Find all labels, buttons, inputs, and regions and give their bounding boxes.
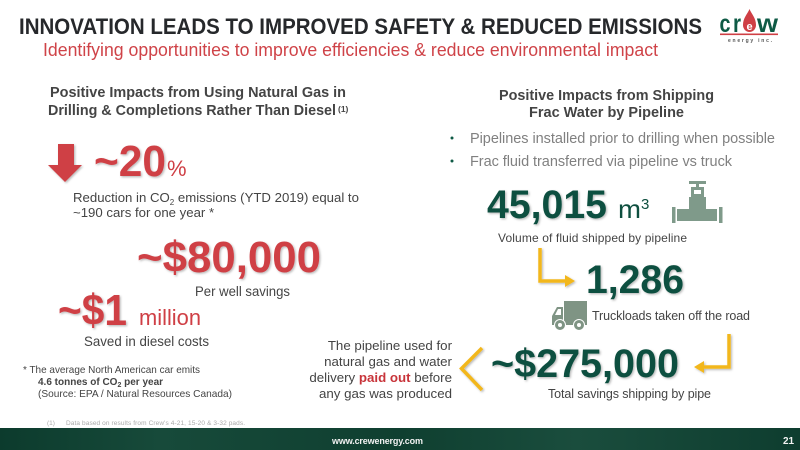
callout: pipeline paid out: delivery paid out before xyxy=(309,370,452,385)
stat: 20 percent: % xyxy=(167,156,187,181)
stat: volume shipped: 3 xyxy=(641,196,649,213)
logo: crew energy inc.: e xyxy=(746,21,753,33)
text: CO2 reduction: 2 xyxy=(170,198,175,207)
icon: truck xyxy=(552,301,587,330)
callout: pipeline paid out: any gas was produced xyxy=(319,386,452,401)
left panel heading: (1) xyxy=(338,104,349,114)
icon: pipe valve xyxy=(672,181,722,223)
footnote: average car emissions: 4.6 tonnes of CO xyxy=(38,377,117,388)
stat: 1 million xyxy=(58,286,201,335)
right panel heading: Frac Water by Pipeline xyxy=(529,105,684,121)
label: truckloads: Truckloads taken off the road xyxy=(592,309,750,323)
panel: natural gas impacts xyxy=(23,85,359,400)
text: CO2 reduction xyxy=(73,190,359,220)
footer url: www.crewenergy.com xyxy=(331,436,423,446)
footnote: data source: (1) xyxy=(47,420,55,427)
icon: chevron xyxy=(462,348,482,390)
footnote: average car emissions: 2 xyxy=(117,382,121,389)
stat: per well savings: ~$80,000 xyxy=(137,233,321,282)
footnote: average car emissions: per year xyxy=(121,377,163,388)
footer bar xyxy=(0,428,800,450)
arrow: volume to truckloads xyxy=(540,248,575,287)
callout: pipeline paid out: The pipeline used for xyxy=(328,338,453,353)
title: INNOVATION LEADS TO IMPROVED SAFETY & REDUCED EMISSIONS xyxy=(19,14,702,39)
left panel heading: Drilling & Completions Rather Than Diesel xyxy=(48,103,336,119)
right panel heading xyxy=(499,88,714,121)
text: CO2 reduction: ~190 cars for one year * xyxy=(73,205,214,220)
stat: total savings: ~$275,000 xyxy=(491,342,679,386)
logo: crew energy inc.: energy inc. xyxy=(728,38,773,44)
bullet list xyxy=(450,131,775,170)
footnote: average car emissions: (Source: EPA / Natural Resources Canada) xyxy=(38,388,232,400)
bullet list: Frac fluid transferred via pipeline vs truck xyxy=(470,154,733,170)
logo: crew energy inc.: r xyxy=(733,10,741,38)
stat: 1 million: ~$1 xyxy=(58,286,127,335)
panel: pipeline impacts xyxy=(309,88,775,401)
icon: red down arrow xyxy=(48,144,82,182)
label: total savings: Total savings shipping by pipe xyxy=(548,387,711,401)
bullet list: Pipelines installed prior to drilling when possible xyxy=(470,131,775,147)
callout: pipeline paid out: natural gas and water xyxy=(324,354,453,369)
stat: 1 million: million xyxy=(139,305,201,330)
text: CO2 reduction: Reduction in CO xyxy=(73,190,170,205)
page number: 21 xyxy=(783,436,795,447)
left panel heading xyxy=(48,85,349,119)
callout: pipeline paid out xyxy=(309,338,453,401)
label: saved in diesel costs: Saved in diesel costs xyxy=(84,333,209,349)
stat: 20 percent: ~20 xyxy=(94,137,166,186)
stat: volume shipped: m xyxy=(618,194,641,224)
subtitle: Identifying opportunities to improve efficiencies & reduce environmental impact xyxy=(43,40,658,60)
label: volume of fluid: Volume of fluid shipped by pipeline xyxy=(498,231,687,245)
logo: crew energy inc.: w xyxy=(756,10,779,38)
logo: crew energy inc.: c xyxy=(720,10,731,38)
stat: truckloads: 1,286 xyxy=(586,258,684,302)
footnote: average car emissions xyxy=(23,364,232,400)
stat: volume shipped: 45,015 xyxy=(487,183,607,227)
left panel heading: Positive Impacts from Using Natural Gas in xyxy=(50,85,346,101)
arrow: truckloads to savings xyxy=(694,334,729,373)
footnote: data source: Data based on results from Crew's 4-21, 15-20 & 3-32 pads. xyxy=(66,420,245,427)
label: per well savings: Per well savings xyxy=(195,284,290,299)
text: CO2 reduction: emissions (YTD 2019) equal to xyxy=(174,190,359,205)
footnote: average car emissions: * The average North American car emits xyxy=(23,364,200,376)
logo: crew energy inc. xyxy=(720,9,779,44)
right panel heading: Positive Impacts from Shipping xyxy=(499,88,714,104)
